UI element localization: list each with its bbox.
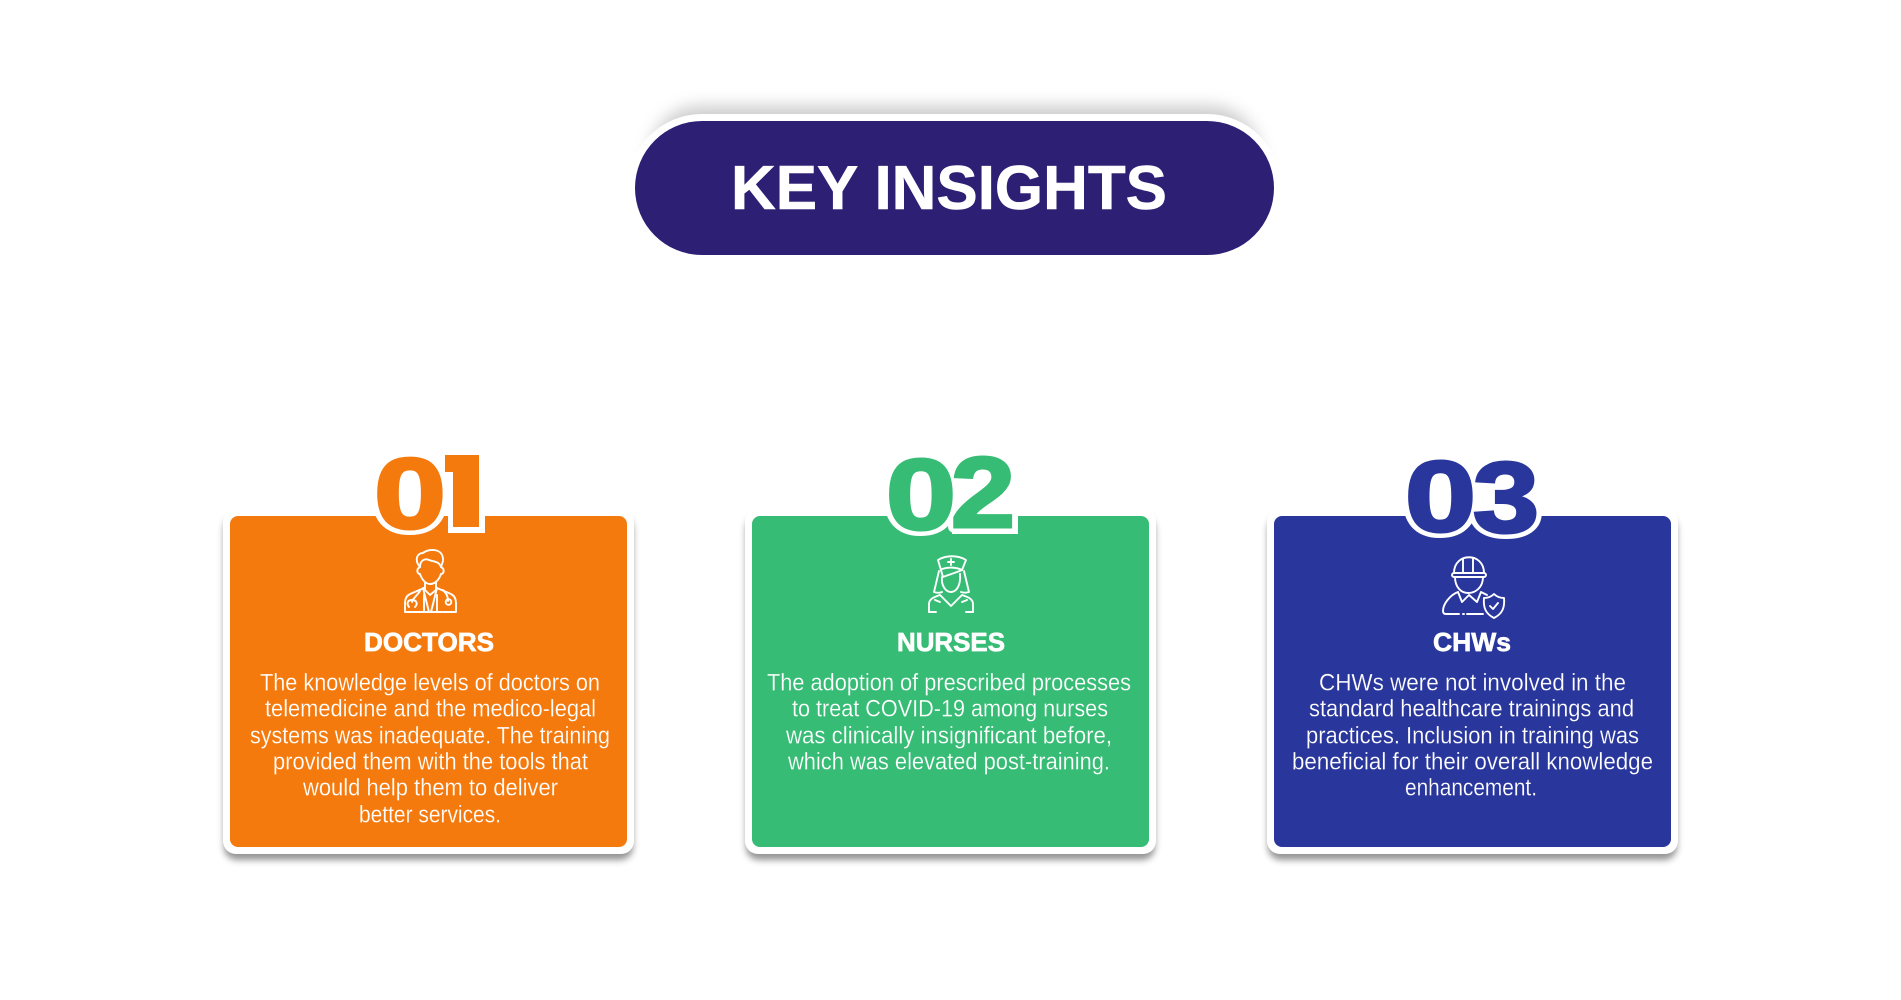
number 03: 0 bbox=[1405, 441, 1476, 553]
icon: nurse bbox=[929, 556, 973, 612]
text block: The adoption of prescribed processes bbox=[767, 670, 1131, 696]
text block bbox=[250, 670, 610, 828]
text block: practices. Inclusion in training was bbox=[1306, 722, 1639, 750]
number 02 bbox=[886, 437, 1018, 551]
heading: NURSES bbox=[897, 627, 1005, 657]
text block: better services. bbox=[359, 802, 501, 828]
text block bbox=[1292, 670, 1653, 802]
panel: CHWs bbox=[1267, 441, 1678, 860]
text block: was clinically insignificant before, bbox=[785, 722, 1112, 750]
number 02: 2 bbox=[951, 437, 1015, 549]
text block: would help them to deliver bbox=[302, 774, 558, 802]
number 02: 0 bbox=[886, 439, 956, 551]
text block: enhancement. bbox=[1405, 774, 1537, 802]
text block: provided them with the tools that bbox=[273, 748, 588, 776]
heading: DOCTORS bbox=[364, 627, 494, 657]
title: KEY INSIGHTS bbox=[731, 154, 1167, 223]
panel: nurses bbox=[745, 437, 1156, 860]
number 02: 0 bbox=[886, 439, 956, 551]
number 03 bbox=[1405, 441, 1539, 554]
text block: The knowledge levels of doctors on bbox=[260, 670, 600, 696]
text block: to treat COVID-19 among nurses bbox=[792, 696, 1108, 722]
heading: CHWs bbox=[1433, 627, 1511, 657]
text block: systems was inadequate. The training bbox=[250, 722, 610, 750]
title pill bbox=[628, 106, 1281, 262]
icon: health worker bbox=[1443, 557, 1504, 618]
number 01: 0 bbox=[374, 438, 446, 550]
text block: beneficial for their overall knowledge bbox=[1292, 748, 1653, 776]
text block: CHWs were not involved in the bbox=[1319, 670, 1626, 696]
number 01: 0 bbox=[374, 438, 446, 550]
number 03: 3 bbox=[1473, 442, 1539, 554]
number 03: 0 bbox=[1405, 441, 1476, 553]
icon: doctor bbox=[405, 550, 456, 612]
number 03: 3 bbox=[1473, 442, 1539, 554]
text block: which was elevated post-training. bbox=[787, 748, 1110, 776]
number 01 bbox=[374, 438, 485, 550]
text block: standard healthcare trainings and bbox=[1309, 696, 1634, 722]
text block bbox=[767, 670, 1131, 776]
text block: telemedicine and the medico-legal bbox=[265, 696, 596, 722]
number 02: 2 bbox=[951, 437, 1015, 549]
panel: doctors bbox=[223, 438, 634, 860]
